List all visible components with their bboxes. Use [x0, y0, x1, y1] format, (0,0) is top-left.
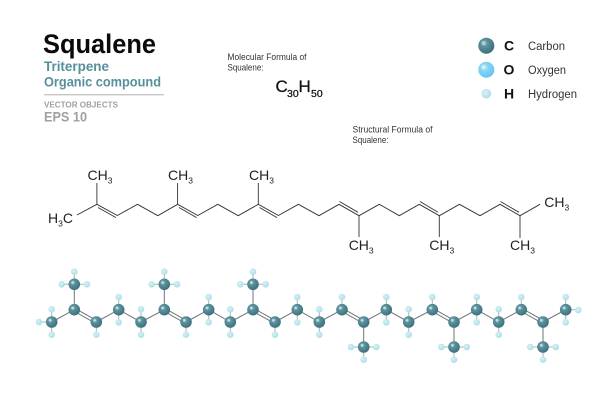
subtitle: compound class: Organic compound [44, 74, 161, 90]
vector objects note [44, 99, 118, 125]
vector objects note: EPS 10 [44, 109, 87, 125]
methyl labels: CH [88, 167, 108, 183]
molecular formula: C [276, 77, 288, 96]
methyl labels: H [48, 210, 58, 226]
methyl labels [48, 167, 570, 256]
legend: carbon: C [504, 38, 514, 54]
subtitle: compound class: Triterpene [44, 58, 109, 74]
methyl labels: 3 [369, 246, 374, 256]
structural formula label: Squalene: [352, 135, 388, 145]
bonds [52, 284, 566, 347]
methyl labels: 3 [450, 246, 455, 256]
molecular formula label [228, 52, 307, 72]
molecular formula [276, 77, 323, 100]
molecular formula: H [298, 77, 311, 96]
ball and stick model [36, 268, 582, 363]
molecular formula: 30 [287, 88, 299, 100]
methyl labels: 3 [530, 246, 535, 256]
legend: oxygen: O [504, 62, 514, 78]
structural formula label: Structural Formula of [352, 125, 433, 135]
methyl labels: CH [510, 237, 530, 253]
title: Squalene [43, 29, 156, 59]
legend [478, 38, 577, 102]
molecular formula: 50 [311, 88, 323, 100]
hydrogen bonds [39, 272, 578, 360]
legend: carbon: Carbon [528, 41, 565, 53]
carbon atoms [46, 278, 571, 353]
methyl labels: CH [544, 194, 565, 210]
methyl labels: CH [249, 167, 269, 183]
methyl labels: 3 [108, 176, 113, 186]
methyl labels: C [63, 210, 73, 226]
methyl labels: CH [168, 167, 188, 183]
structural formula label [352, 125, 433, 145]
molecular formula label: Squalene: [228, 62, 264, 72]
subtitle: compound class [44, 58, 161, 90]
methyl labels: 3 [58, 218, 63, 228]
legend: oxygen: Oxygen [528, 65, 566, 77]
legend: oxygen [478, 62, 566, 78]
legend: hydrogen: H [504, 86, 514, 102]
methyl labels: CH [429, 237, 450, 253]
legend: hydrogen [482, 86, 577, 102]
methyl labels: 3 [565, 202, 570, 212]
legend: hydrogen: Hydrogen [528, 89, 577, 101]
molecular formula label: Molecular Formula of [228, 52, 307, 62]
methyl labels: 3 [269, 176, 274, 186]
vector objects note: VECTOR OBJECTS [44, 99, 118, 109]
skeletal bonds [77, 183, 540, 238]
methyl labels: 3 [188, 176, 193, 186]
structural formula [48, 167, 570, 256]
legend: carbon [478, 38, 565, 54]
hydrogen atoms [36, 268, 582, 363]
methyl labels: CH [349, 237, 369, 253]
